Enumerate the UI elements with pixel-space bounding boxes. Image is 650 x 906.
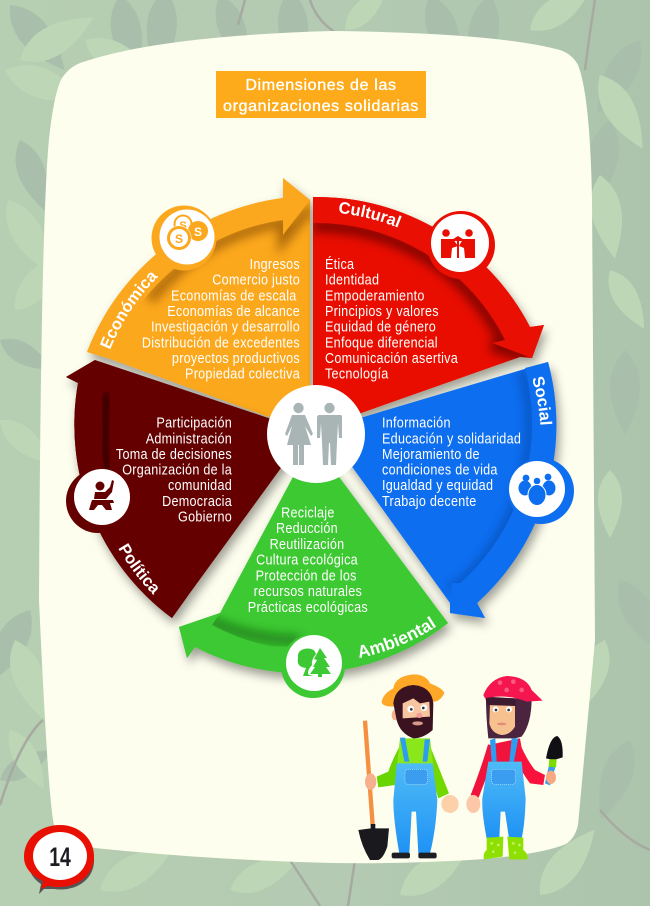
- text: Ambiental list: recursos naturales: [254, 583, 362, 599]
- text: Económica list: proyectos productivos: [172, 350, 300, 366]
- text: Económica list: Economías de escala: [171, 287, 297, 304]
- text: Ambiental list: Prácticas ecológicas: [248, 599, 368, 615]
- illustration: farmer man: [358, 674, 459, 860]
- icon: coins: [152, 206, 216, 270]
- text: Social list: condiciones de vida: [382, 462, 498, 478]
- panel: Económica: [86, 178, 313, 418]
- text: Social list: Igualdad y equidad: [382, 477, 493, 493]
- text: Cultural list: Enfoque diferencial: [325, 334, 438, 351]
- text: Cultural list: Empoderamiento: [325, 287, 425, 304]
- icon: speaker: [66, 469, 130, 533]
- text: Cultural list: Comunicación asertiva: [325, 350, 458, 366]
- panel: Social: [347, 362, 574, 629]
- icon: centre people: [267, 385, 365, 483]
- text: Ambiental list: Cultura ecológica: [256, 552, 358, 568]
- panel: Política: [66, 360, 290, 628]
- text: Económica list: Propiedad colectiva: [185, 366, 300, 382]
- title: [216, 71, 426, 118]
- panel: Cultural: [310, 196, 551, 418]
- page number badge: 14: [49, 842, 71, 872]
- text: Política list: Administración: [146, 431, 232, 447]
- text: Política list: Organización de la: [122, 462, 232, 478]
- text: Política list: Toma de decisiones: [116, 446, 232, 462]
- page number badge: [24, 825, 94, 894]
- icon: people group: [508, 458, 574, 524]
- text: Económica list: Comercio justo: [212, 272, 300, 288]
- title: Dimensiones de las: [245, 77, 397, 94]
- label: Política: Política: [118, 543, 158, 595]
- icon: meeting: [427, 211, 495, 279]
- text: Política list: Gobierno: [178, 509, 232, 525]
- text: Cultural list: Equidad de género: [325, 319, 436, 335]
- text: Cultural list: Ética: [325, 256, 354, 272]
- label: Ambiental: Ambiental: [359, 616, 436, 658]
- title: organizaciones solidarias: [223, 98, 419, 115]
- text: Ambiental list: Reutilización: [270, 536, 344, 552]
- text: Política list: comunidad: [168, 477, 232, 493]
- text: Ambiental list: Protección de los: [256, 568, 357, 584]
- label: Cultural: Cultural: [339, 202, 402, 228]
- text: Económica list: Economías de alcance: [167, 303, 300, 319]
- text: Ambiental list: Reducción: [276, 520, 338, 536]
- text: Económica list: Distribución de excedentes: [142, 334, 300, 351]
- text: Social list: Mejoramiento de: [382, 446, 480, 462]
- icon: trees: [281, 634, 345, 698]
- panel: Ambiental: [177, 474, 454, 698]
- text: Social list: Información: [382, 415, 451, 431]
- text: Política list: Participación: [156, 415, 232, 431]
- icon: coins: S: [175, 232, 183, 246]
- label: Económica: Económica: [100, 272, 158, 349]
- illustration: farmer woman: [466, 676, 563, 859]
- label: Social: Social: [532, 376, 552, 425]
- text: Política list: Democracia: [162, 493, 232, 509]
- icon: coins: S: [179, 220, 187, 232]
- text: Cultural list: Identidad: [325, 272, 379, 288]
- text: Social list: Trabajo decente: [382, 493, 477, 509]
- panel: cream card: [39, 31, 595, 863]
- text: Cultural list: Principios y valores: [325, 303, 439, 319]
- text: Ambiental list: Reciclaje: [281, 505, 335, 521]
- icon: coins: S: [194, 225, 202, 239]
- text: Económica list: Ingresos: [250, 256, 300, 272]
- text: Social list: Educación y solidaridad: [382, 431, 521, 447]
- text: Cultural list: Tecnología: [325, 366, 389, 382]
- text: Económica list: Investigación y desarrollo: [151, 319, 300, 335]
